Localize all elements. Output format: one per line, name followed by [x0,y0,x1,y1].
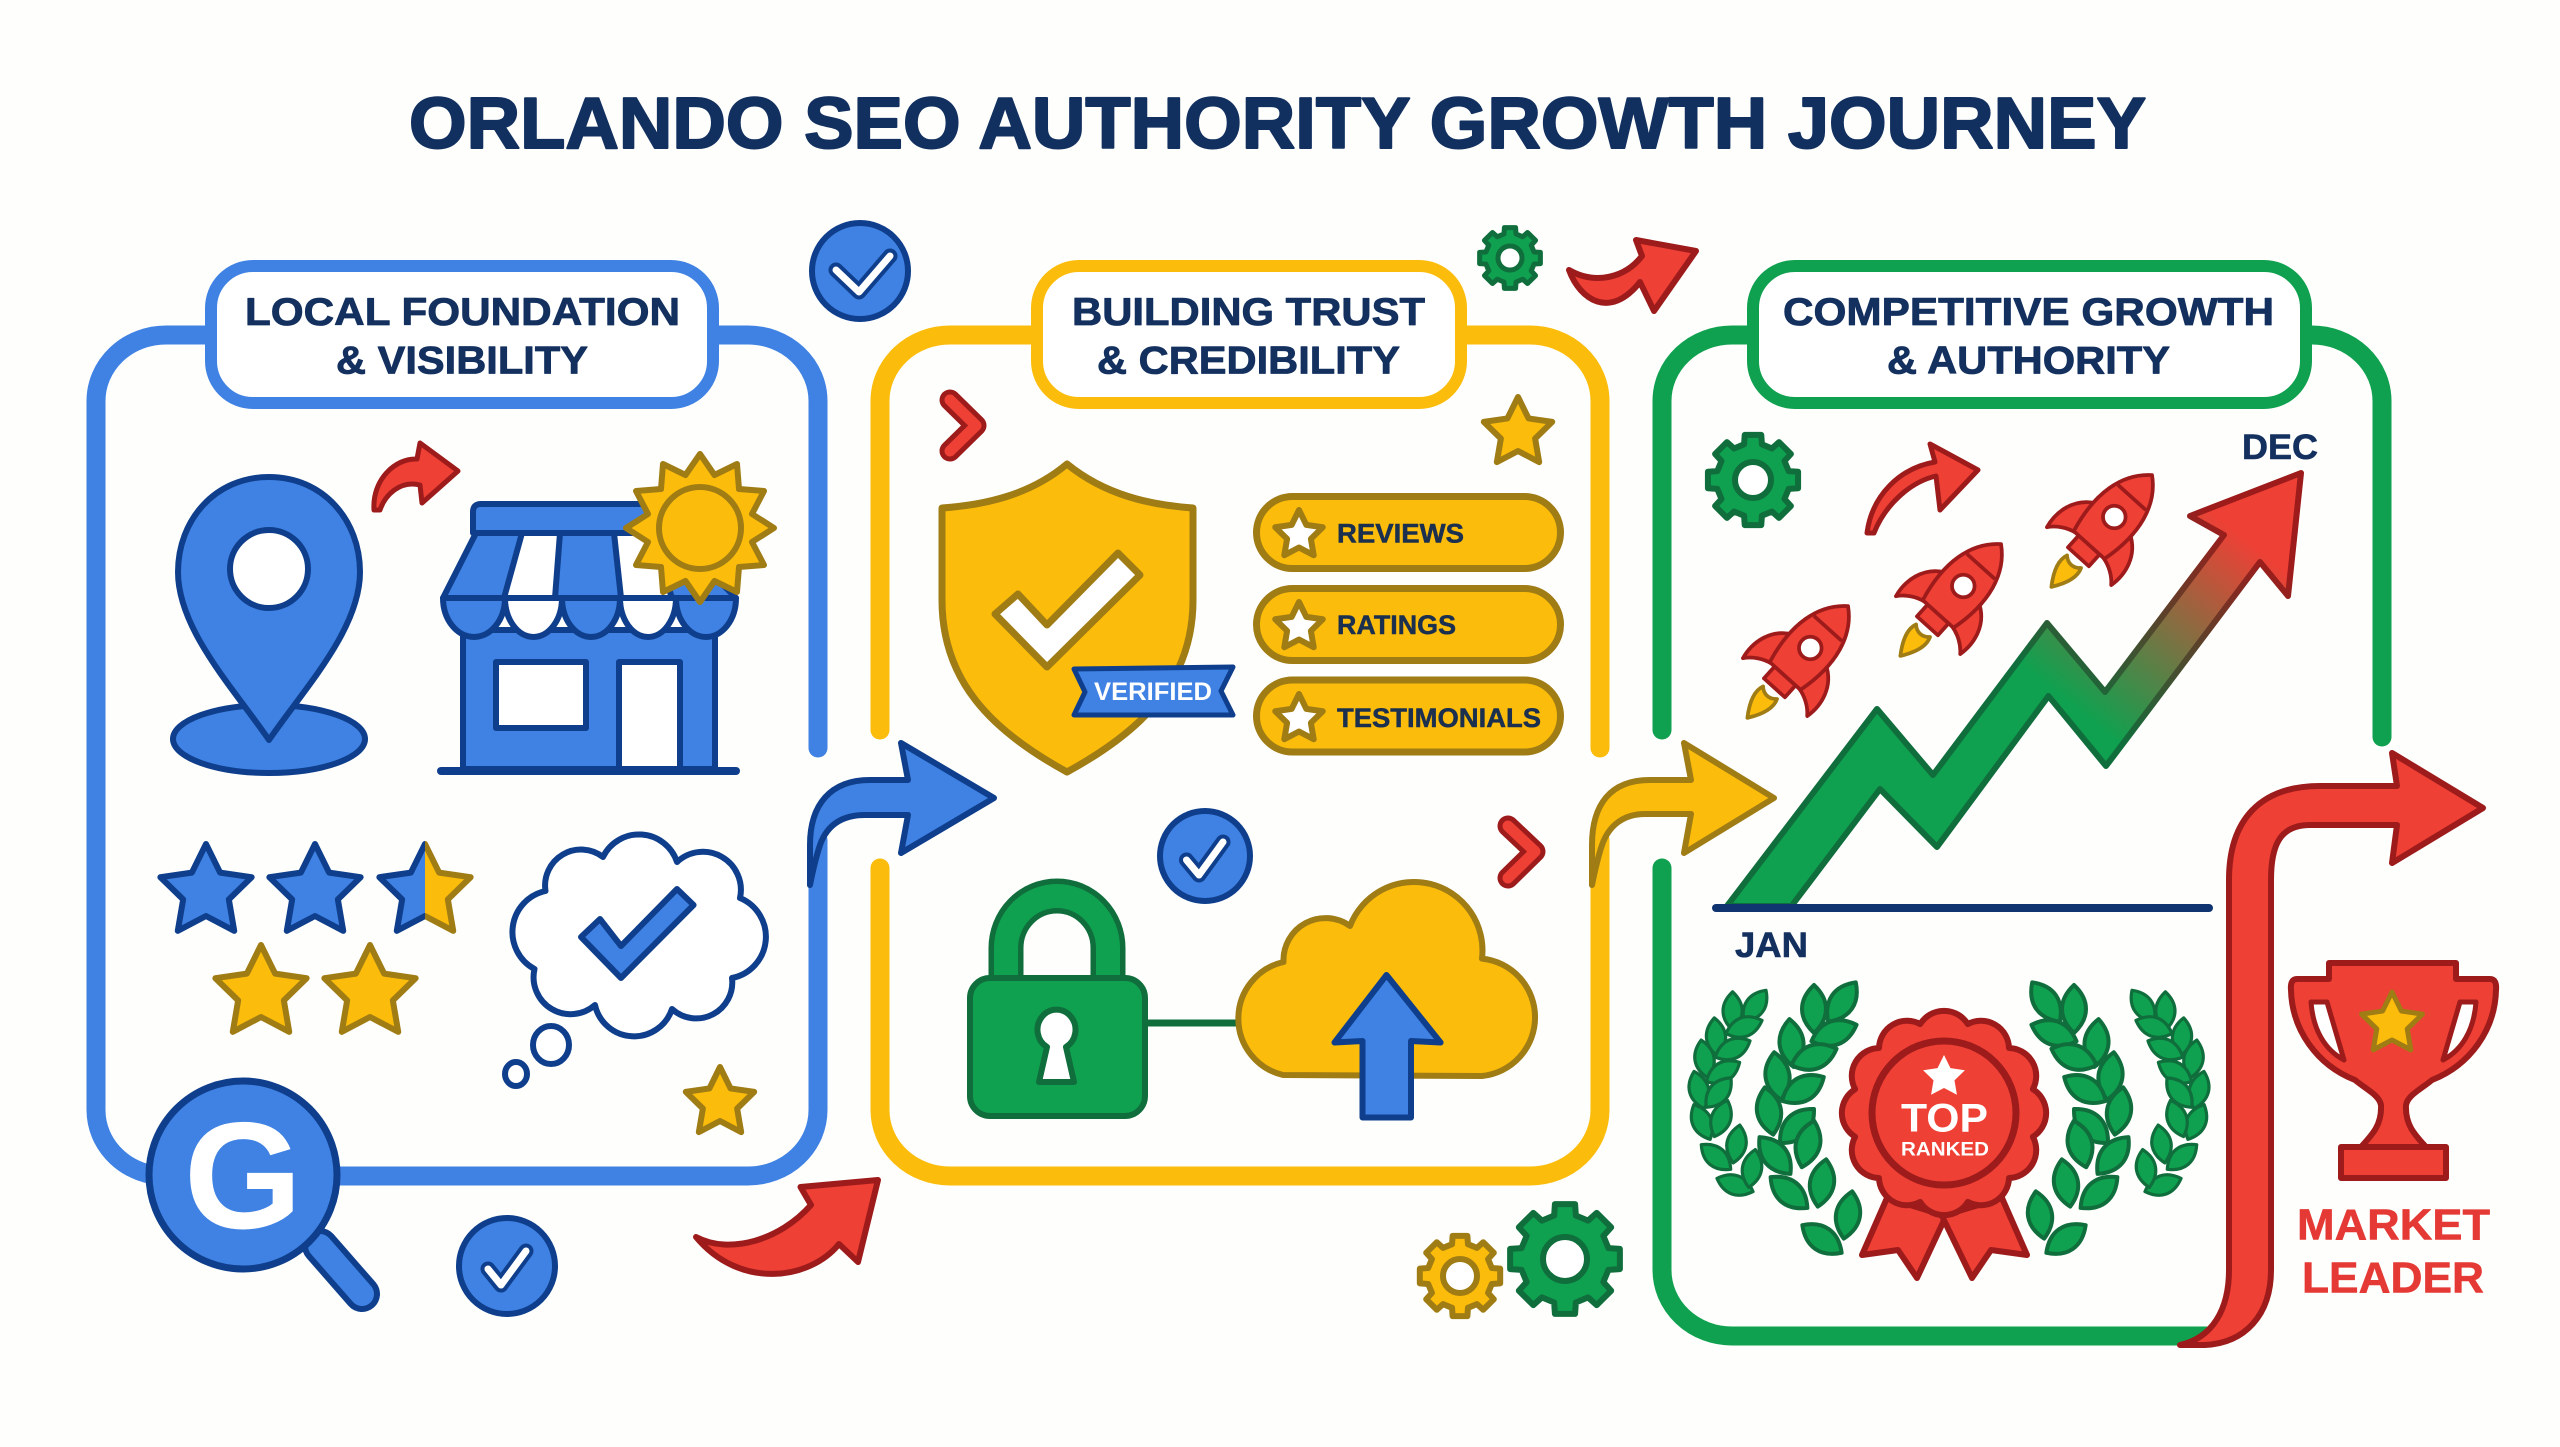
badge: top ranked [1842,1011,2046,1278]
panel heading: & CREDIBILITY [1097,340,1400,382]
icon: cloud upload [1238,882,1535,1118]
badge: top ranked: RANKED [1901,1140,1989,1160]
icon: check badge [459,1218,555,1314]
icon: green gear [1708,435,1798,525]
panel: building trust and credibility [880,266,1600,1316]
panel frame [1662,335,2382,1336]
icon: rocket [1714,576,1881,748]
label: market leader [2297,1200,2490,1302]
icon: google magnifier: G [184,1091,302,1261]
icon: map pin [173,477,365,773]
pill: reviews [1256,496,1560,568]
icon: top red arrow [1569,240,1696,311]
chart: growth line from jan to dec: DEC [2242,428,2318,467]
panel heading: LOCAL FOUNDATION [245,291,680,334]
panel frame [96,335,818,1176]
icon: small yellow gear [1420,1236,1500,1316]
panel: local foundation and visibility [96,266,878,1314]
chart: growth line from jan to dec [1716,428,2318,965]
title: ORLANDO SEO AUTHORITY GROWTH JOURNEY [409,84,2146,164]
panel heading: & VISIBILITY [336,340,588,382]
icon: red chevron [950,400,976,451]
check badge: top [812,223,908,319]
panel frame [880,335,1600,1176]
pill: testimonials [1256,680,1560,752]
icon: rocket [2018,445,2185,617]
icon: verified shield: VERIFIED [1094,678,1212,706]
icon: small red arrow [374,443,458,510]
arrow: blue connector [810,743,994,885]
icon: red chevron [1508,826,1535,878]
icon: small yellow star [686,1067,754,1132]
icon: laurel wreaths [1685,975,2213,1263]
pill: testimonials: TESTIMONIALS [1337,703,1541,733]
panel heading: & AUTHORITY [1887,340,2170,382]
icon: large green gear [1510,1204,1620,1314]
panel heading [211,266,713,403]
icon: trophy [2291,963,2496,1178]
badge: top ranked: TOP [1901,1096,1988,1140]
chart: growth line from jan to dec: JAN [1735,926,1808,965]
label: market leader: MARKET [2297,1200,2490,1250]
icon: thought cloud with check [505,834,766,1086]
icon: curved red arrow [1867,444,1978,533]
panel heading [1753,266,2306,403]
icon: padlock [970,896,1145,1116]
icon: yellow star [1484,397,1552,462]
icon: google magnifier [149,1081,362,1294]
arrow: yellow connector [1592,743,1774,885]
icon: top green gear [1480,228,1540,288]
label: market leader: LEADER [2302,1254,2484,1302]
pill: reviews: REVIEWS [1337,518,1464,548]
connector line [1145,1020,1241,1026]
arrow: red market leader path [2180,753,2483,1345]
icon: check badge [1160,811,1250,901]
pill: ratings: RATINGS [1337,610,1456,640]
icon: storefront [441,504,736,771]
pill: ratings [1256,588,1560,660]
panel heading [1037,266,1461,403]
panel: competitive growth and authority [1662,266,2382,1336]
icon: curved red arrow [696,1180,878,1274]
icon: sun [626,454,774,602]
icon: five star rating [160,844,471,1032]
icon: rocket [1867,514,2034,686]
panel heading: COMPETITIVE GROWTH [1783,291,2274,334]
icon: verified shield [942,464,1233,772]
panel heading: BUILDING TRUST [1072,291,1425,334]
